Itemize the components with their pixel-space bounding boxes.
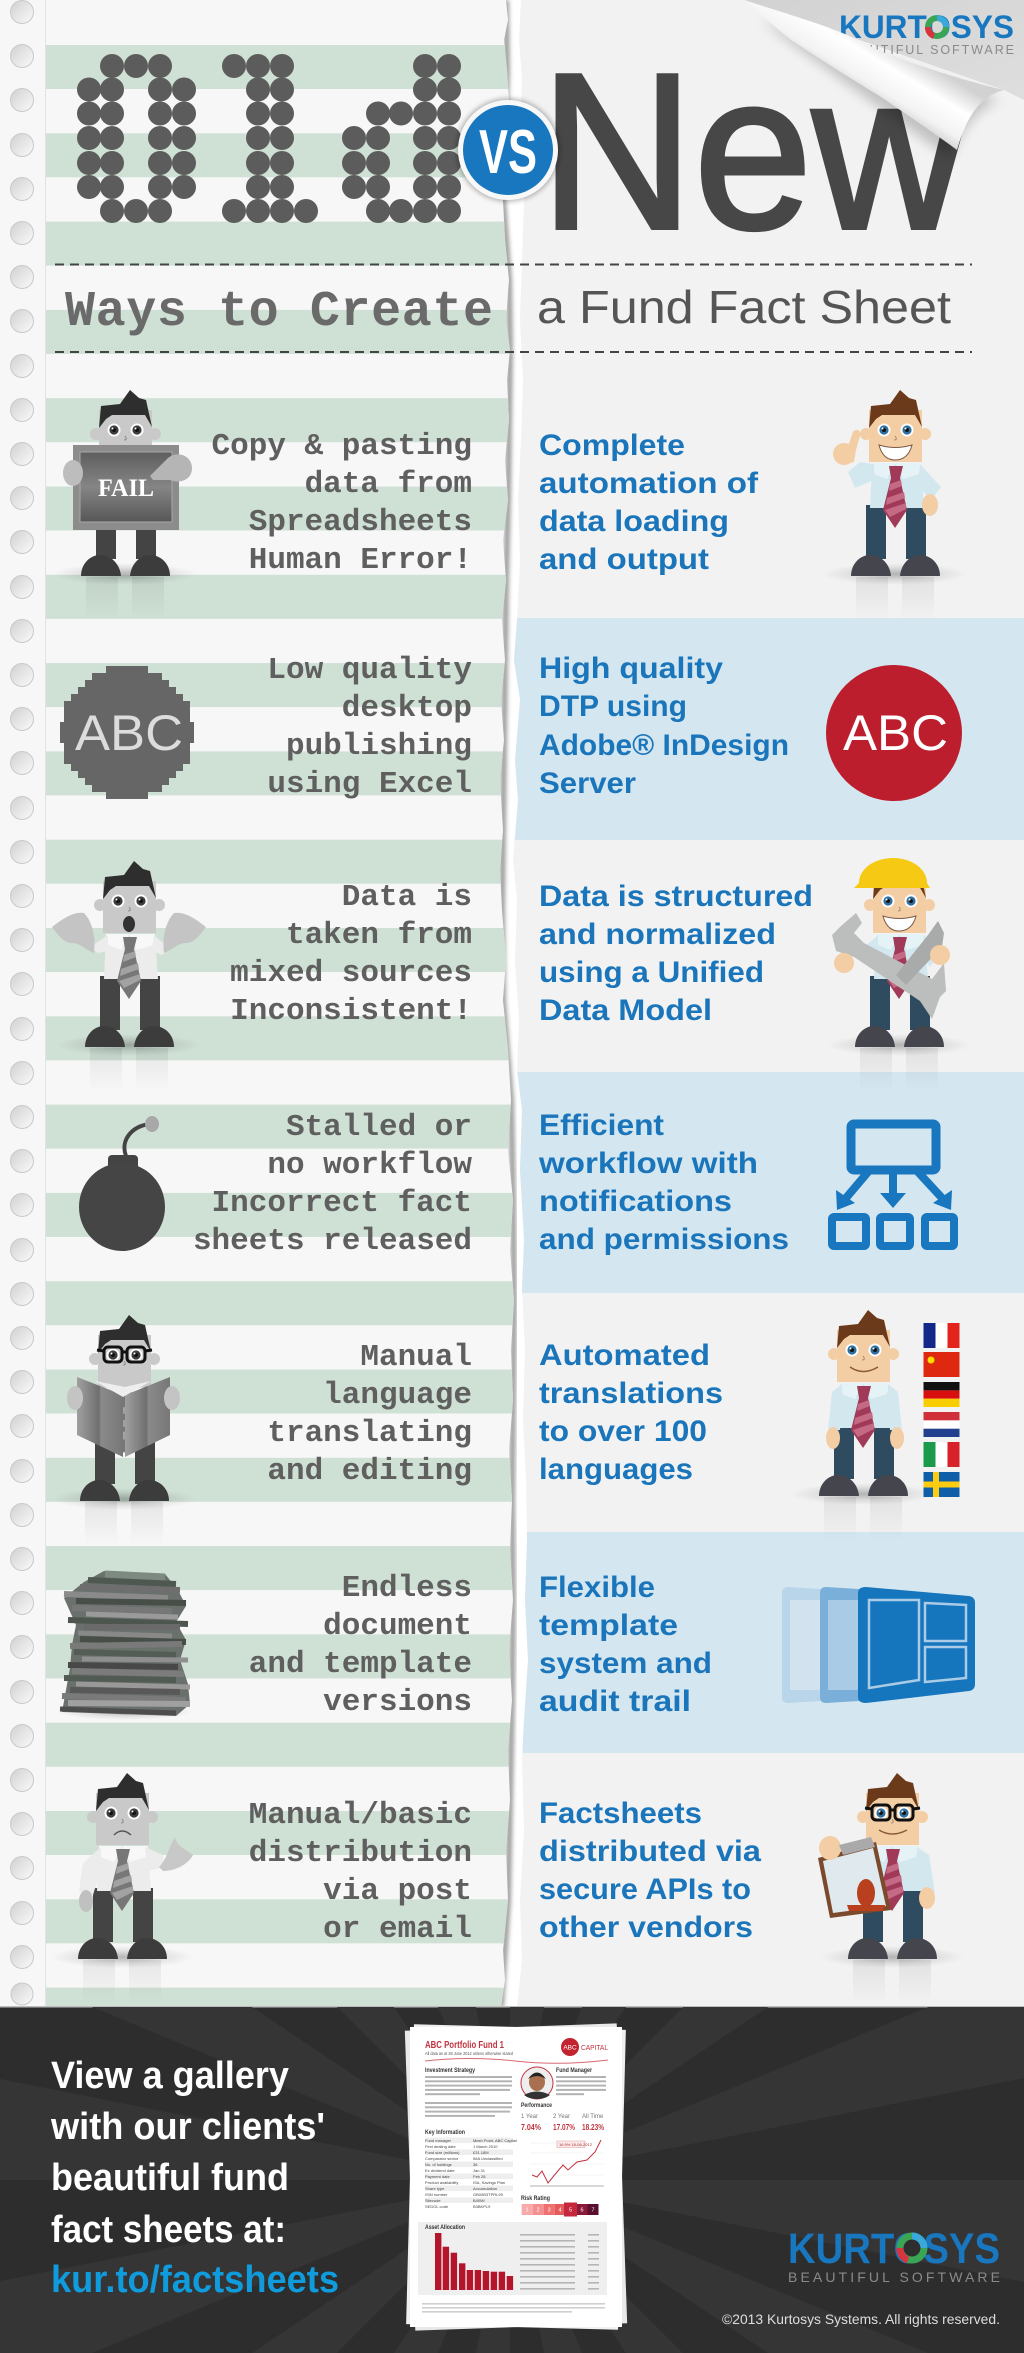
fact sheet sample: Risk Rating xyxy=(521,2196,550,2202)
row 6 left text xyxy=(249,1571,472,1720)
fact sheet sample: GB00B3TPRL99 xyxy=(473,2192,504,2197)
fact sheet sample: 2 xyxy=(536,2208,540,2214)
row 6 left: stack of papers xyxy=(57,1571,193,1720)
row 6 left text: and template xyxy=(249,1647,472,1682)
fact sheet sample: Key Information xyxy=(425,2130,465,2136)
row 5 left: character reading a book xyxy=(52,1315,196,1546)
logo: Kurtosys footer: KURTOSYS xyxy=(788,2225,1000,2273)
row 7 left text: or email xyxy=(323,1912,472,1947)
row 1 right: thumbs up character xyxy=(823,390,967,621)
row 5 left text: Manual xyxy=(360,1340,472,1375)
subtitle: a Fund Fact Sheet: a Fund Fact Sheet xyxy=(537,281,951,333)
row 2 left text: publishing xyxy=(286,729,472,764)
row 2 right text: Server xyxy=(539,767,636,800)
fact sheet sample: B40MI xyxy=(473,2198,485,2203)
row 7 left text: Manual/basic xyxy=(249,1798,472,1833)
fact sheet sample: Product availability xyxy=(425,2180,458,2185)
row 1 left text: Copy & pasting xyxy=(212,429,472,464)
fact sheet sample: 1 Year xyxy=(521,2114,538,2120)
row 5 right: smiling character xyxy=(791,1310,935,1541)
fact sheet sample: ABC xyxy=(563,2044,577,2052)
fact sheet sample: IMA Unclassified xyxy=(473,2156,503,2161)
flags: six languages xyxy=(924,1323,960,1497)
row 6 right: template layers icon xyxy=(782,1587,975,1703)
row 4 left text: no workflow xyxy=(267,1148,472,1183)
row 1 right text: automation of xyxy=(539,467,759,500)
row 6 right text: system and xyxy=(539,1647,712,1680)
row 7 left: sad character xyxy=(50,1773,194,2004)
row 5 right text xyxy=(539,1339,723,1486)
fact sheet sample: No. of holdings xyxy=(425,2162,452,2167)
row 7 right: character with clipboard xyxy=(818,1773,964,2004)
panel: old way ruled paper column xyxy=(45,0,514,2006)
fact sheet sample: 18.23% xyxy=(582,2122,604,2132)
row 7 left text: via post xyxy=(323,1874,472,1909)
row 4 left: bomb icon xyxy=(79,1116,165,1251)
row 1 right text: and output xyxy=(539,543,709,576)
fact sheet sample: Comparator sector xyxy=(425,2156,459,2161)
row 4 left text: Stalled or xyxy=(286,1110,472,1145)
footer call to action xyxy=(50,2055,339,2301)
row 3 right text xyxy=(539,880,813,1027)
row 1 right text: Complete xyxy=(539,429,685,462)
fact sheet sample: 2 Year xyxy=(553,2114,570,2120)
fact sheet sample: Asset Allocation xyxy=(425,2225,465,2231)
subtitle: Ways to Create: Ways to Create xyxy=(65,284,493,341)
row 7 right text xyxy=(539,1797,761,1944)
row 4 right text: workflow with xyxy=(538,1147,758,1180)
footer call to action: fact sheets at: xyxy=(51,2209,286,2251)
fact sheet sample: Sitecode xyxy=(425,2198,441,2203)
row 2 left text xyxy=(267,653,472,802)
panel: new way column xyxy=(500,0,1024,2007)
fact sheet sample: Accumulation xyxy=(473,2186,497,2191)
fact sheet sample: First dealing date xyxy=(425,2144,456,2149)
fact sheet sample: 5 xyxy=(569,2208,572,2214)
dashed rules xyxy=(55,264,972,352)
row 5 right text: translations xyxy=(539,1377,723,1410)
fact sheet sample: All Time xyxy=(582,2114,604,2120)
row 6 right text xyxy=(539,1571,712,1718)
flag: Germany xyxy=(924,1382,960,1407)
row 3 right text: Data is structured xyxy=(539,880,813,913)
row 6 right text: Flexible xyxy=(539,1571,655,1604)
footer call to action: View a gallery xyxy=(51,2055,289,2097)
row 3 right text: using a Unified xyxy=(539,956,764,989)
row 2 left text: using Excel xyxy=(267,767,472,802)
row 3 left text: Data is xyxy=(342,880,472,915)
fact sheet sample: Jan 31 xyxy=(473,2168,486,2173)
footer call to action: kur.to/factsheets xyxy=(51,2259,339,2301)
fact sheet sample: Fund size (millions) xyxy=(425,2150,460,2155)
row 2 right: red ABC icon xyxy=(826,665,962,801)
row 2 left: pixelated ABC icon: ABC xyxy=(75,705,183,761)
logo: Kurtosys footer: BEAUTIFUL SOFTWARE xyxy=(788,2269,1000,2285)
row 5 right text: to over 100 xyxy=(539,1415,707,1448)
fact sheet sample xyxy=(405,2023,627,2331)
fact sheet sample: All data as at 28 June 2012 unless otherwise stated xyxy=(425,2051,513,2056)
fact sheet sample: 16.9% 18-06-2012 xyxy=(559,2142,593,2147)
row 2 right text: DTP using xyxy=(539,690,687,723)
row 1 left text xyxy=(212,429,472,578)
flag: Italy xyxy=(924,1442,960,1467)
row 5 left text: and editing xyxy=(267,1454,472,1489)
row 2 left: pixelated ABC icon xyxy=(60,666,194,799)
fact sheet sample: 7.04% xyxy=(521,2122,541,2132)
VS badge: VS xyxy=(479,118,537,187)
row 2 left text: Low quality xyxy=(267,653,472,688)
row 4 right text: and permissions xyxy=(539,1223,789,1256)
page curl flap xyxy=(744,0,1004,158)
title: Old in dot matrix xyxy=(77,54,461,223)
footer call to action: with our clients' xyxy=(50,2106,325,2148)
fact sheet sample: ISIN number xyxy=(425,2192,448,2197)
fact sheet sample: B3BKPL9 xyxy=(473,2204,491,2209)
flag: France xyxy=(924,1323,960,1348)
row 5 left text xyxy=(267,1340,472,1489)
row 2 right: red ABC icon: ABC xyxy=(843,705,948,761)
row 7 left text xyxy=(249,1798,472,1947)
row 5 left text: language xyxy=(323,1378,472,1413)
row 3 left: shrugging character xyxy=(52,861,206,1092)
row 7 right text: Factsheets xyxy=(539,1797,702,1830)
row 6 left text: document xyxy=(323,1609,472,1644)
flag: Netherlands xyxy=(924,1412,960,1437)
fact sheet sample: Investment Strategy xyxy=(425,2068,476,2074)
binder holes xyxy=(10,0,34,2005)
fact sheet sample: 1 xyxy=(525,2208,529,2214)
row 1 left text: data from xyxy=(305,467,472,502)
row 1 left text: Spreadsheets xyxy=(249,505,472,540)
row 3 right text: Data Model xyxy=(539,994,712,1027)
row 1 right text xyxy=(539,429,759,576)
row 4 left text: Incorrect fact xyxy=(212,1186,472,1221)
fact sheet sample: Fund manager xyxy=(425,2138,452,2143)
row 3 left text: Inconsistent! xyxy=(230,994,472,1029)
flag: Sweden xyxy=(924,1472,960,1497)
fact sheet sample: Ex dividend date xyxy=(425,2168,455,2173)
row 6 left text: Endless xyxy=(342,1571,472,1606)
panel: footer xyxy=(0,2006,1024,2353)
fact sheet sample: Feb 28 xyxy=(473,2174,486,2179)
torn edge shadow xyxy=(501,0,514,2007)
row 1 right text: data loading xyxy=(539,505,729,538)
page curl backing xyxy=(744,0,1024,100)
fact sheet sample: 4 xyxy=(558,2208,562,2214)
row 6 right text: audit trail xyxy=(539,1685,691,1718)
fact sheet sample: SEDOL code xyxy=(425,2204,449,2209)
fact sheet sample: Payment date xyxy=(425,2174,450,2179)
row 2 right text xyxy=(539,652,789,800)
row 3 left text xyxy=(230,880,472,1029)
fact sheet sample: Mesh Point, ABC Capital xyxy=(473,2138,517,2143)
row 5 left text: translating xyxy=(267,1416,472,1451)
row 4 right text xyxy=(538,1109,789,1256)
fact sheet sample: £31.18M xyxy=(473,2150,489,2155)
logo: Kurtosys top: KURTOSYS xyxy=(839,9,1014,45)
title: New: New xyxy=(540,28,967,276)
row 3 left text: taken from xyxy=(286,918,472,953)
row 7 right text: distributed via xyxy=(539,1835,761,1868)
fact sheet sample: CAPITAL xyxy=(581,2045,608,2052)
logo: Kurtosys top: BEAUTIFUL SOFTWARE xyxy=(839,43,1014,57)
row 6 left text: versions xyxy=(323,1685,472,1720)
row 1 left text: Human Error! xyxy=(249,543,472,578)
fact sheet sample: Fund Manager xyxy=(556,2068,593,2074)
row 3 right: character with hard hat and wrench xyxy=(827,858,971,1092)
row 7 right text: other vendors xyxy=(539,1911,753,1944)
flag: China xyxy=(924,1352,960,1377)
VS badge xyxy=(456,98,560,202)
fact sheet sample: 3 xyxy=(547,2208,551,2214)
fact sheet sample: ISA, Savings Plan xyxy=(473,2180,505,2185)
fact sheet sample: Share type xyxy=(425,2186,445,2191)
row 5 right text: Automated xyxy=(539,1339,710,1372)
row 2 right text: High quality xyxy=(539,652,723,685)
row 7 right text: secure APIs to xyxy=(539,1873,751,1906)
row 2 left text: desktop xyxy=(342,691,472,726)
fact sheet sample: 6 xyxy=(580,2208,584,2214)
row 4 left text: sheets released xyxy=(193,1224,472,1259)
fact sheet sample: 36 xyxy=(473,2162,478,2167)
row 4 right text: Efficient xyxy=(539,1109,664,1142)
footer call to action: beautiful fund xyxy=(51,2157,289,2199)
row 3 left text: mixed sources xyxy=(230,956,472,991)
fact sheet sample: 1 March 2010 xyxy=(473,2144,498,2149)
row 1 left: fail character: FAIL xyxy=(98,475,154,502)
row 4 right: workflow icon xyxy=(832,1124,954,1246)
row 2 right text: Adobe® InDesign xyxy=(539,729,789,762)
row 1 left: fail character xyxy=(53,390,197,621)
copyright: ©2013 Kurtosys Systems. All rights reserved. xyxy=(722,2311,1000,2327)
row 3 right text: and normalized xyxy=(539,918,776,951)
row 4 left text xyxy=(193,1110,472,1259)
fact sheet sample: 7 xyxy=(591,2208,595,2214)
row 7 left text: distribution xyxy=(249,1836,472,1871)
row 6 right text: template xyxy=(539,1609,678,1642)
fact sheet sample: ABC Portfolio Fund 1 xyxy=(425,2039,504,2051)
row 5 right text: languages xyxy=(539,1453,693,1486)
row 4 right text: notifications xyxy=(539,1185,732,1218)
fact sheet sample: Performance xyxy=(521,2103,553,2109)
fact sheet sample: 17.07% xyxy=(553,2122,575,2132)
